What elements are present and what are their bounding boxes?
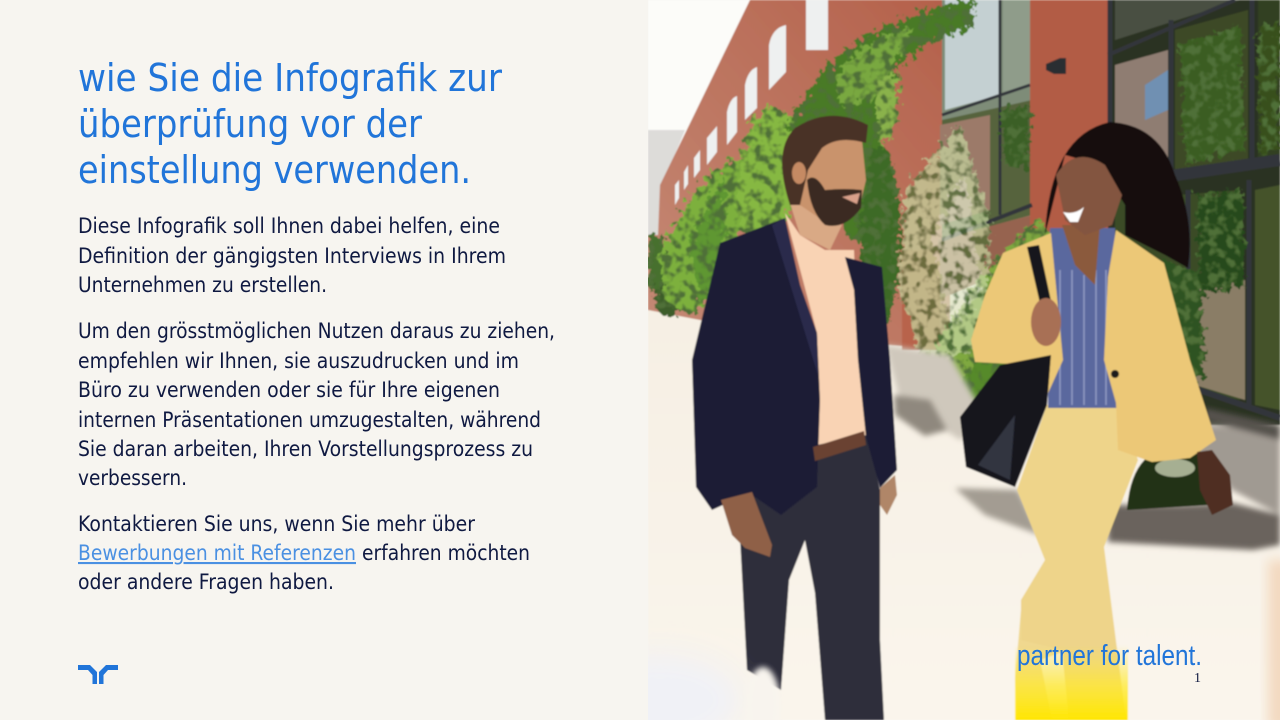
woman lower hand	[1197, 450, 1233, 515]
paragraph: purpose of the infographic: Diese Infografik soll Ihnen dabei helfen, eine	[78, 214, 500, 238]
man ear	[792, 162, 806, 184]
woman bag	[960, 355, 1051, 487]
man jacket	[692, 218, 897, 515]
woman smile	[1063, 207, 1084, 222]
flowering shrub	[1127, 450, 1208, 510]
photo: two colleagues walking outside a brick building	[580, 0, 1280, 720]
distant haze	[648, 130, 685, 235]
climbing vine	[785, 0, 975, 240]
woman trailing leg and shoe	[1015, 610, 1070, 720]
man hair	[782, 116, 868, 205]
paragraph: contact	[78, 512, 530, 594]
title	[78, 56, 502, 192]
brick pillar	[1030, 0, 1108, 240]
woman jacket	[971, 230, 1216, 462]
page number: 1	[1194, 671, 1201, 686]
ground	[648, 300, 1280, 720]
paragraph: how to use it: Sie daran arbeiten, Ihren Vorstellungsprozess zu	[78, 437, 533, 461]
title: überprüfung vor der	[78, 102, 422, 146]
paragraph: purpose of the infographic	[78, 214, 506, 297]
window frames	[942, 0, 1280, 418]
jacket button	[1111, 370, 1119, 378]
paragraph: contact: erfahren möchten	[362, 541, 530, 565]
man trousers	[737, 435, 884, 720]
title: wie Sie die Infografik zur	[78, 56, 502, 100]
slogan: partner for talent.	[1017, 640, 1202, 672]
bag strap	[1027, 245, 1053, 325]
paragraph: purpose of the infographic: Unternehmen zu erstellen.	[78, 273, 327, 297]
man	[692, 116, 897, 720]
woman raised hand	[1031, 298, 1061, 346]
pale grass plant	[898, 125, 990, 370]
foliage	[648, 0, 1280, 425]
woman hair	[1045, 122, 1190, 268]
paragraph: how to use it: internen Präsentationen umzugestalten, während	[78, 408, 541, 432]
wall lamp	[1046, 58, 1066, 74]
shirt stripes	[1060, 270, 1106, 405]
icon: logo	[78, 665, 118, 684]
jacket lapel shading	[772, 218, 818, 375]
man belt	[813, 431, 866, 461]
bush by pier	[925, 218, 1060, 425]
man neck	[789, 200, 842, 250]
woman	[960, 122, 1233, 720]
bag highlight	[978, 415, 1015, 480]
woman neck	[1062, 225, 1100, 285]
man right hand	[880, 475, 897, 515]
woman face	[1056, 157, 1122, 235]
right windows	[1108, 0, 1280, 425]
right hedge	[1165, 260, 1205, 390]
woman trousers	[1017, 405, 1138, 720]
left panel background	[0, 0, 648, 720]
bottom-left glare	[580, 655, 740, 720]
man shirt	[785, 213, 866, 445]
paragraph: how to use it: Um den grösstmöglichen Nutzen daraus zu ziehen,	[78, 319, 555, 343]
woman shirt	[1048, 228, 1118, 408]
sky	[648, 0, 778, 220]
title: einstellung verwenden.	[78, 148, 471, 192]
paragraph: how to use it	[78, 319, 555, 490]
paragraph: contact: Kontaktieren Sie uns, wenn Sie mehr über	[78, 512, 475, 536]
paragraph: purpose of the infographic: Definition der gängigsten Interviews in Ihrem	[78, 244, 506, 268]
man beard	[807, 178, 862, 226]
paragraph: how to use it: Büro zu verwenden oder sie für Ihre eigenen	[78, 378, 500, 402]
paragraph: contact: Bewerbungen mit Referenzen	[78, 541, 356, 565]
yellow glow	[1015, 645, 1128, 720]
paragraph: how to use it: verbessern.	[78, 466, 187, 490]
lower brick pier	[902, 250, 940, 350]
paragraph: how to use it: empfehlen wir Ihnen, sie auszudrucken und im	[78, 349, 519, 373]
lens flare	[746, 667, 780, 720]
mid windows	[941, 0, 1031, 120]
arched windows	[675, 0, 828, 205]
right edge glare	[1268, 560, 1280, 720]
distant trees	[648, 235, 664, 290]
ground shadows	[894, 395, 1280, 550]
brick building	[648, 0, 950, 350]
paragraph: contact: oder andere Fragen haben.	[78, 570, 334, 594]
man face	[800, 138, 868, 216]
pavement shade	[888, 342, 977, 442]
man mouth	[842, 193, 860, 204]
man left hand	[721, 492, 772, 557]
